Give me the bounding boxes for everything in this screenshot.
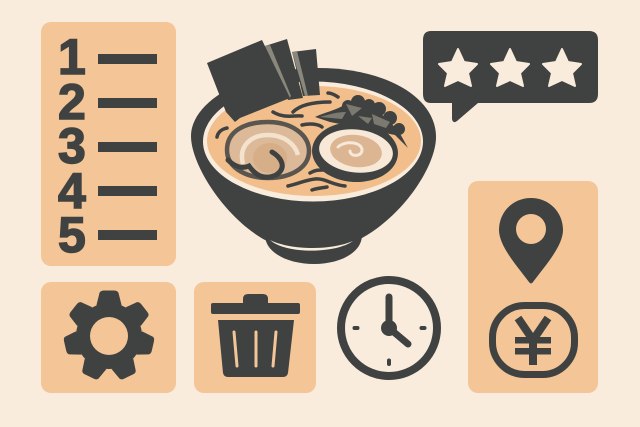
icon: trash can (211, 294, 300, 377)
star 1 (439, 49, 477, 86)
rank 1 (58, 29, 157, 85)
icon: clock (341, 280, 437, 376)
egg slice right (310, 120, 400, 184)
star 3 (543, 49, 581, 86)
foot highlight (270, 240, 353, 251)
greens topping (315, 95, 408, 148)
clock hands (354, 297, 424, 364)
icon: gear (62, 291, 156, 382)
rank 2 (58, 74, 157, 130)
rank 3: 3 (58, 118, 86, 174)
narutomaki slice left (227, 122, 309, 178)
panel: location and price (468, 181, 598, 393)
speech bubble with three stars (423, 31, 598, 122)
panel: trash (194, 282, 316, 393)
star 2 (491, 49, 529, 86)
bowl body (191, 68, 436, 248)
rank 1: 1 (58, 29, 86, 85)
soup (207, 86, 421, 196)
panel: ranking list (41, 22, 176, 266)
rank 4 (58, 163, 157, 219)
rank 3 (58, 118, 157, 174)
illustration: ramen bowl (191, 39, 436, 264)
noodles (217, 93, 345, 190)
soup rim (203, 82, 423, 202)
bowl foot (265, 236, 362, 264)
nori sheets (207, 39, 320, 122)
icon: yen coin (492, 306, 574, 374)
icon: map pin (499, 198, 563, 284)
rank 2: 2 (58, 74, 86, 130)
rank 5: 5 (58, 207, 86, 263)
rank 5 (58, 207, 157, 263)
rank 4: 4 (58, 163, 86, 219)
panel: settings (41, 282, 176, 393)
